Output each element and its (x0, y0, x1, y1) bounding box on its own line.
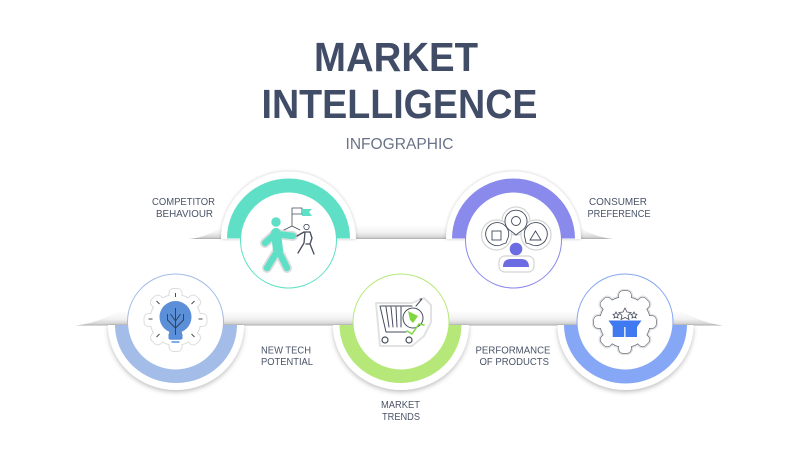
icon: gear with product box (594, 291, 656, 353)
label: consumer preference (588, 196, 650, 220)
label: new tech potential: NEW TECH (261, 344, 311, 356)
panel: consumer preference (446, 172, 581, 288)
panel: performance of products (558, 274, 694, 390)
icon: light bulb circuit (144, 289, 206, 351)
subtitle: INFOGRAPHIC (346, 136, 454, 153)
top shelf shadow (189, 225, 613, 239)
icon: leader with flag (265, 208, 314, 268)
label: performance of products (476, 344, 550, 368)
lower shelf shadow (76, 311, 723, 326)
label: competitor behaviour: BEHAVIOUR (156, 208, 213, 220)
label: performance of products: OF PRODUCTS (480, 356, 549, 368)
panel: new tech potential (108, 274, 244, 390)
label: performance of products: PERFORMANCE (476, 344, 550, 356)
label: new tech potential (261, 344, 313, 368)
title: INTELLIGENCE (262, 81, 538, 127)
label: consumer preference: CONSUMER (589, 196, 647, 208)
label: new tech potential: POTENTIAL (261, 356, 313, 368)
icon: person choosing shapes (482, 207, 551, 272)
title (262, 34, 538, 127)
label: consumer preference: PREFERENCE (588, 208, 650, 220)
label: market trends: TRENDS (382, 411, 420, 423)
title: MARKET (314, 34, 478, 80)
label: market trends: MARKET (381, 399, 421, 411)
panel: competitor behaviour (221, 172, 356, 288)
label: competitor behaviour (152, 196, 215, 220)
panel: market trends (333, 274, 469, 390)
label: competitor behaviour: COMPETITOR (152, 196, 215, 208)
icon: shopping cart with trend (376, 298, 431, 346)
label: market trends (381, 399, 421, 423)
